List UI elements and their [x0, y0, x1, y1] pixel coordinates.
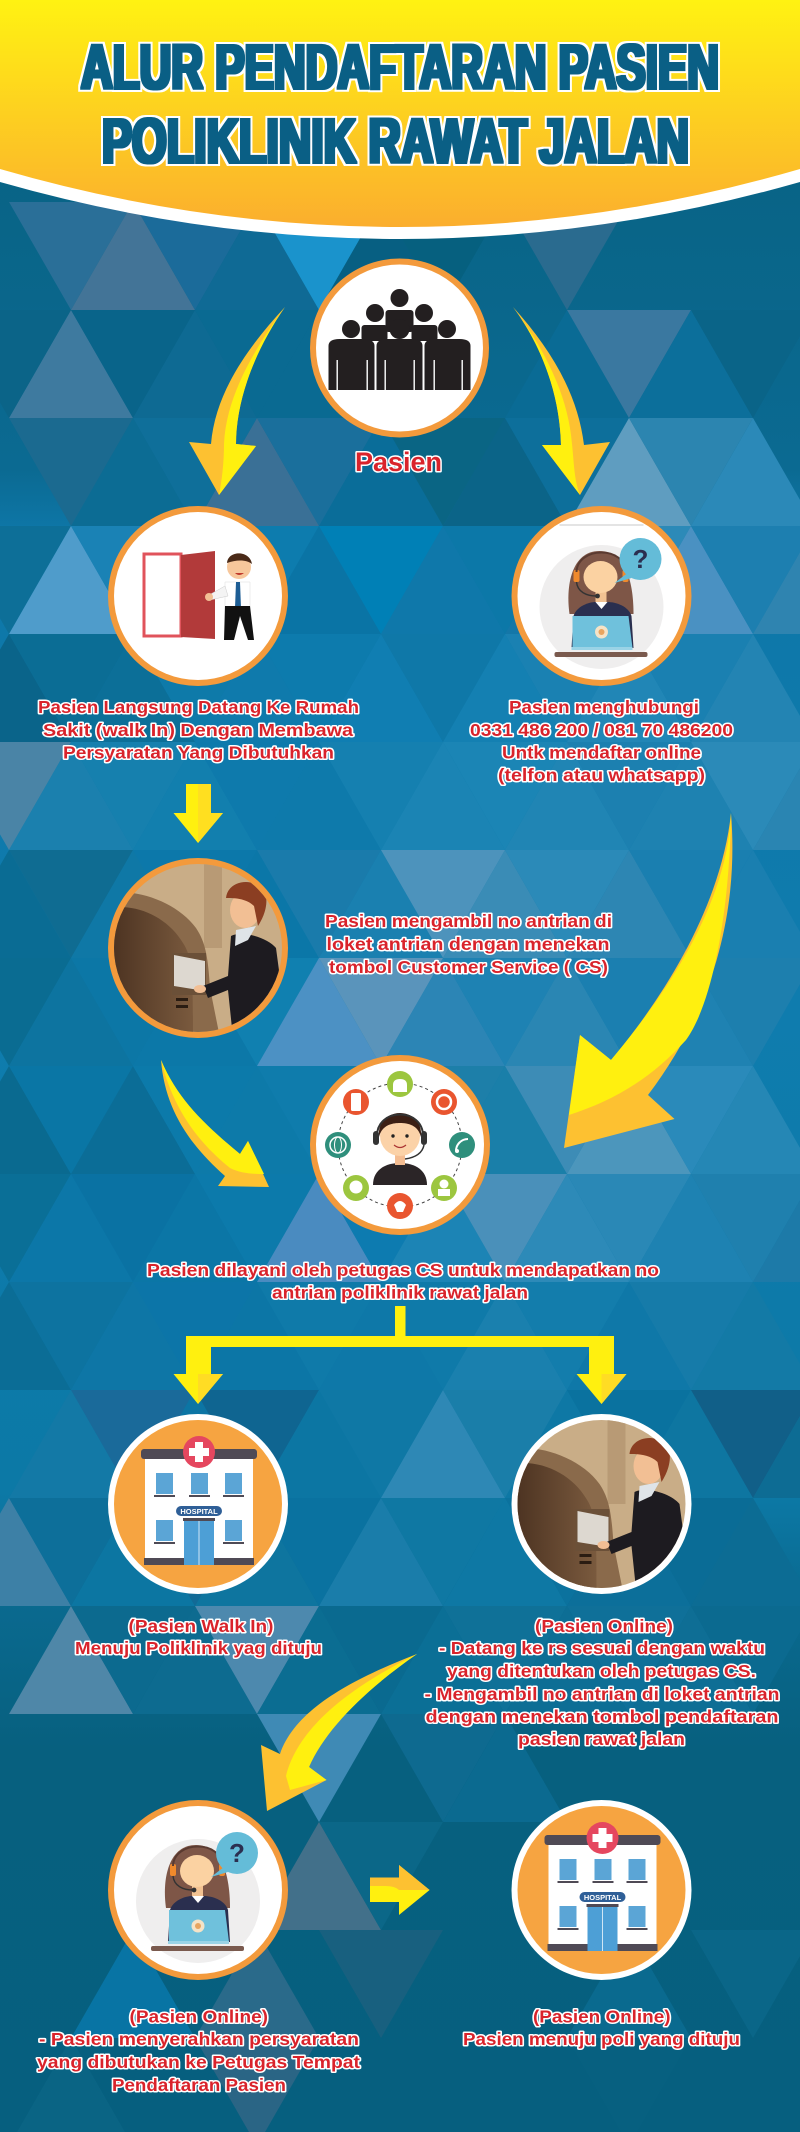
circle: online call operator	[512, 506, 692, 686]
circle: customer service	[310, 1055, 490, 1235]
text: online submits requirements	[37, 2006, 360, 2095]
text: queue ticket instruction: loket antrian dengan menekan	[326, 934, 610, 954]
text: walk-in instructions: Persyaratan Yang Dibutuhkan	[63, 742, 334, 762]
text: online instructions: 0331 486 200 / 081 70 486200	[470, 720, 733, 740]
arrow: curve from queue machine to customer service	[161, 1060, 269, 1187]
label: Pasien: Pasien	[355, 447, 442, 477]
text: online submits requirements: Pendaftaran Pasien	[112, 2075, 286, 2095]
text: online arrival instructions: (Pasien Online)	[535, 1616, 673, 1636]
text: online arrival instructions: dengan menekan tombol pendaftaran	[426, 1706, 778, 1726]
icon: hospital building: HOSPITAL	[584, 1893, 622, 1902]
arrow: down to queue machine	[174, 784, 223, 843]
circle: online registration desk	[108, 1800, 288, 1980]
icon: CS agent with headset	[373, 1113, 427, 1185]
icon: hospital building	[141, 1436, 257, 1565]
icon: operator with laptop	[554, 551, 648, 657]
icon: group of people	[328, 289, 470, 390]
text: walk-in to polyclinic: Menuju Poliklinik yag dituju	[75, 1638, 322, 1658]
text: online submits requirements: - Pasien menyerahkan persyaratan	[39, 2029, 359, 2049]
arrow: curve from online machine to registration	[261, 1654, 417, 1811]
text: customer service step: Pasien dilayani oleh petugas CS untuk mendapatkan no	[147, 1260, 659, 1280]
text: online instructions: (telfon atau whatsapp)	[498, 765, 705, 785]
icon: operator with laptop	[151, 1845, 244, 1951]
icon: hospital building	[544, 1822, 660, 1951]
text: walk-in to polyclinic	[75, 1616, 322, 1658]
title	[81, 31, 719, 177]
text: online goes to polyclinic: Pasien menuju poli yang dituju	[463, 2029, 740, 2049]
text: online arrival instructions: - Mengambil no antrian di loket antrian	[424, 1684, 780, 1704]
text: online arrival instructions: - Datang ke rs sesuai dengan waktu	[439, 1638, 765, 1658]
arrow: big curve from online to customer service	[564, 813, 732, 1148]
icon: door	[144, 551, 215, 639]
icon: hospital building: HOSPITAL	[180, 1507, 218, 1516]
illustration: man at ticket machine	[518, 1420, 686, 1588]
text: online submits requirements: (Pasien Online)	[130, 2006, 268, 2026]
text: online goes to polyclinic: (Pasien Online)	[533, 2006, 670, 2026]
text: walk-in instructions: Pasien Langsung Datang Ke Rumah	[38, 697, 359, 717]
text: online arrival instructions	[424, 1616, 780, 1749]
text: online instructions: Untk mendaftar online	[502, 742, 701, 762]
text: walk-in to polyclinic: (Pasien Walk In)	[128, 1616, 274, 1636]
text: queue ticket instruction	[325, 911, 612, 977]
text: online instructions: Pasien menghubungi	[509, 697, 699, 717]
circle: hospital walk-in	[108, 1414, 288, 1594]
arrow: patient to walk-in	[189, 307, 285, 495]
circle: hospital online	[512, 1800, 692, 1980]
circle: walk-in door	[108, 506, 288, 686]
icon: man at door	[205, 553, 254, 640]
arrow: right to hospital	[370, 1865, 430, 1915]
text: queue ticket instruction: Pasien mengambil no antrian di	[325, 911, 612, 931]
icon: question bubble: ?	[229, 1838, 245, 1868]
title banner	[0, 0, 800, 239]
text: customer service step	[147, 1260, 659, 1302]
text: walk-in instructions	[38, 697, 359, 762]
text: online instructions	[470, 697, 733, 785]
circle: queue machine online	[512, 1414, 692, 1594]
icon: question bubble	[211, 1832, 258, 1877]
text: online submits requirements: yang dibutukan ke Petugas Tempat	[37, 2052, 360, 2072]
icons: service channels	[325, 1071, 475, 1219]
arrow: branching to two paths	[174, 1306, 626, 1404]
text: online arrival instructions: yang ditentukan oleh petugas CS.	[447, 1661, 756, 1681]
text: queue ticket instruction: tombol Customer Service ( CS)	[329, 957, 608, 977]
illustration: man at ticket machine	[114, 864, 282, 1032]
arrow: patient to online	[513, 307, 610, 495]
text: online goes to polyclinic	[463, 2006, 740, 2049]
icon: question bubble: ?	[633, 544, 648, 574]
text: customer service step: antrian poliklinik rawat jalan	[272, 1282, 528, 1302]
circle: patients	[310, 258, 489, 438]
icon: question bubble	[614, 538, 662, 583]
text: walk-in instructions: Sakit (walk In) Dengan Membawa	[43, 720, 353, 740]
text: online arrival instructions: pasien rawat jalan	[518, 1729, 685, 1749]
circle: queue machine	[108, 858, 288, 1038]
